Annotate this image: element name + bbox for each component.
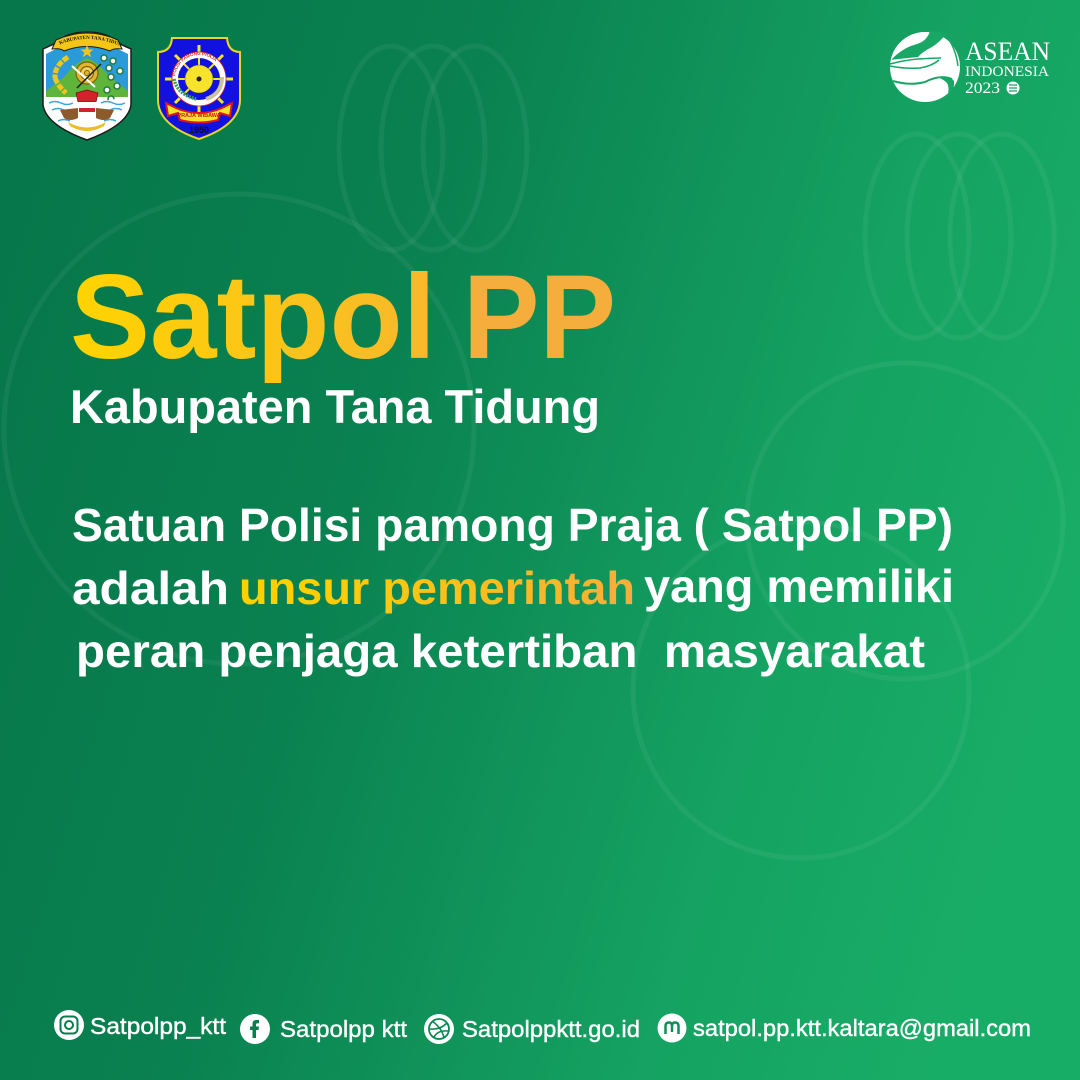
crest star	[80, 45, 94, 57]
crest wheat	[55, 57, 68, 93]
crest sky	[46, 44, 128, 96]
crest rice and cotton	[174, 79, 196, 99]
logo: ASEAN Indonesia 2023: 2023	[965, 80, 1000, 97]
decorative rings	[4, 46, 1063, 858]
crest waves	[46, 97, 128, 137]
crest boat	[76, 90, 98, 102]
logo: ASEAN Indonesia 2023	[889, 31, 1050, 102]
icon: instagram	[54, 1010, 84, 1040]
logo: Satpol PP crest: PRAJA WIBAWA	[177, 113, 221, 119]
crest hill	[46, 58, 128, 97]
crest cotton	[101, 55, 123, 102]
title: Satpol PP: Satpol	[70, 250, 436, 384]
website: Satpolppktt.go.id	[462, 1016, 640, 1042]
body text: adalah	[72, 562, 229, 614]
logo: Satpol PP crest: POLISI PAMONG PRAJA	[172, 52, 216, 76]
logo: Kabupaten Tana Tidung crest	[42, 31, 132, 141]
crest shield	[158, 38, 240, 139]
crest flower	[185, 65, 213, 93]
crest target and weapons	[76, 62, 98, 84]
logo: Satpol PP crest	[157, 37, 241, 140]
crest ring	[175, 55, 223, 103]
footer: social contacts	[54, 1010, 1031, 1044]
title: Satpol PP	[70, 250, 616, 384]
crest ribbon	[52, 33, 122, 51]
icon: mail	[658, 1014, 686, 1042]
icon: facebook	[240, 1014, 270, 1044]
body text: yang memiliki	[644, 560, 954, 612]
logo globe	[889, 31, 960, 102]
facebook name: Satpolpp ktt	[280, 1016, 408, 1042]
email: satpol.pp.ktt.kaltara@gmail.com	[693, 1015, 1031, 1041]
logo: Satpol PP crest: 1950	[189, 125, 209, 135]
body text	[72, 499, 954, 677]
title: Satpol PP: PP	[463, 250, 616, 384]
logo: ASEAN Indonesia 2023: INDONESIA	[965, 64, 1050, 80]
crest shield	[43, 32, 131, 140]
crest wheel spokes	[165, 45, 233, 112]
logo: ASEAN Indonesia 2023: ASEAN	[965, 37, 1050, 66]
body text: peran penjaga ketertiban masyarakat	[76, 625, 925, 677]
subtitle: Kabupaten Tana Tidung	[70, 380, 600, 433]
body text: Satuan Polisi pamong Praja ( Satpol PP)	[72, 499, 953, 551]
crest animals	[60, 108, 78, 120]
icon: dribbble web	[424, 1014, 454, 1044]
crest motto	[68, 122, 106, 131]
crest banner	[166, 103, 232, 122]
body text: unsur pemerintah	[239, 562, 635, 614]
instagram handle: Satpolpp_ktt	[90, 1013, 227, 1039]
